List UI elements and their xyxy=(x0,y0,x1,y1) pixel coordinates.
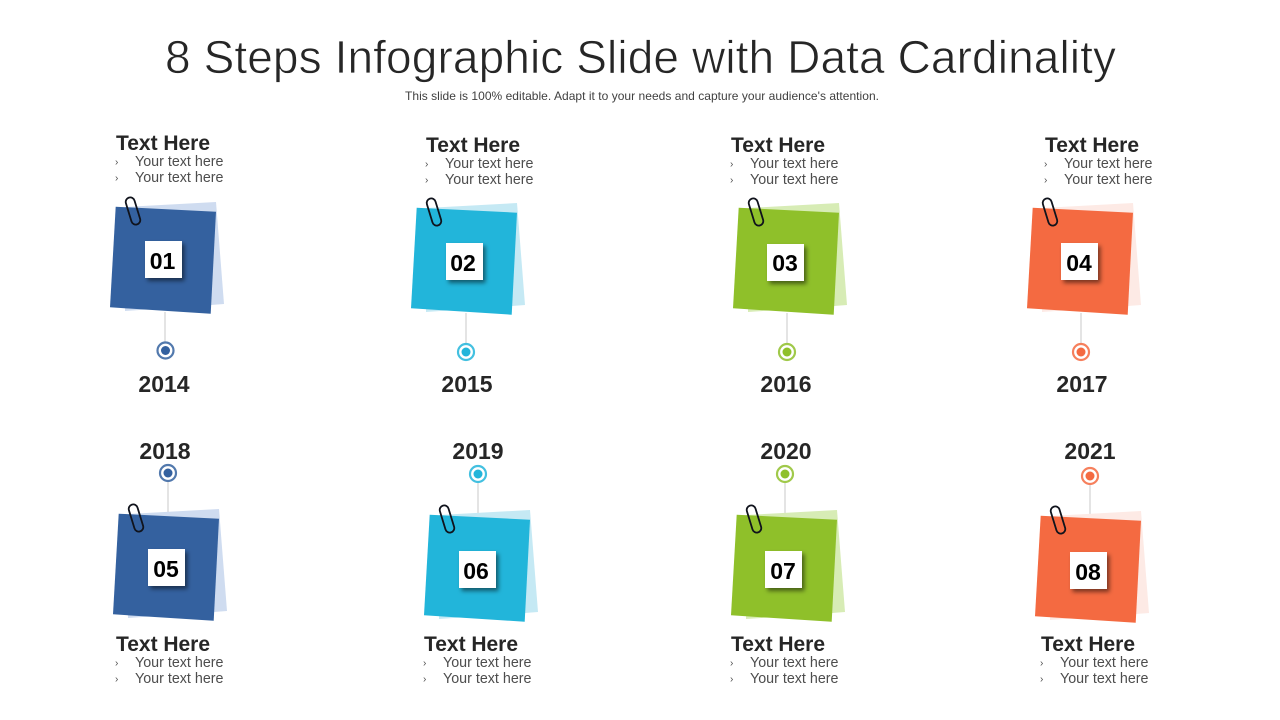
number 01 xyxy=(145,241,182,278)
step 07 xyxy=(730,438,845,687)
text block 07 xyxy=(730,633,839,687)
connector 06 xyxy=(477,483,479,517)
text block 01: › xyxy=(115,173,118,184)
text block 04: Your text here xyxy=(1064,172,1153,188)
text block 02: Your text here xyxy=(445,156,534,172)
number 02: 02 xyxy=(450,250,476,276)
text block 03: › xyxy=(730,159,733,170)
step 03 xyxy=(730,134,847,397)
text block 08: › xyxy=(1040,674,1043,685)
marker 02 xyxy=(458,344,474,360)
text block 08: Text Here xyxy=(1041,633,1135,656)
title: 8 Steps Infographic Slide with Data Cardinality xyxy=(165,31,1116,83)
text block 07: Your text here xyxy=(750,671,839,687)
text block 08 xyxy=(1040,633,1149,687)
connector 08 xyxy=(1089,485,1091,518)
paperclip 04 xyxy=(1042,197,1058,227)
text block 03: Text Here xyxy=(731,134,825,157)
paperclip 07 xyxy=(746,504,762,534)
text block 08: › xyxy=(1040,658,1043,669)
text block 07: › xyxy=(730,658,733,669)
year 2018: 2018 xyxy=(139,438,191,464)
year 2021: 2021 xyxy=(1064,438,1116,464)
text block 08: Your text here xyxy=(1060,671,1149,687)
step 01 xyxy=(110,132,224,397)
number 07 xyxy=(765,551,802,588)
marker 03 xyxy=(779,344,795,360)
text block 07: Your text here xyxy=(750,655,839,671)
step 06 xyxy=(423,438,538,687)
text block 05: Text Here xyxy=(116,633,210,656)
marker 07 xyxy=(777,466,793,482)
text block 05 xyxy=(115,633,224,687)
sticky note 06 xyxy=(424,510,538,622)
text block 06 xyxy=(423,633,532,687)
number 06 xyxy=(459,551,496,588)
text block 02: Your text here xyxy=(445,172,534,188)
step 04 xyxy=(1027,134,1153,397)
text block 05: › xyxy=(115,658,118,669)
year 2014: 2014 xyxy=(138,371,190,397)
text block 03: Your text here xyxy=(750,156,839,172)
sticky note 08 xyxy=(1035,511,1149,623)
text block 02 xyxy=(425,134,534,188)
text block 04 xyxy=(1044,134,1153,188)
text block 04: › xyxy=(1044,159,1047,170)
text block 04: Your text here xyxy=(1064,156,1153,172)
text block 03: Your text here xyxy=(750,172,839,188)
paperclip 02 xyxy=(426,197,442,227)
text block 07: › xyxy=(730,674,733,685)
sticky note 03 xyxy=(733,203,847,315)
text block 06: › xyxy=(423,658,426,669)
text block 03: › xyxy=(730,175,733,186)
number 01: 01 xyxy=(150,248,175,274)
number 03 xyxy=(767,244,804,281)
text block 06: Your text here xyxy=(443,655,532,671)
marker 06 xyxy=(470,466,486,482)
connector 03 xyxy=(786,313,788,344)
subtitle: This slide is 100% editable. Adapt it to your needs and capture your audience's attention. xyxy=(405,89,879,103)
connector 07 xyxy=(784,483,786,517)
text block 04: › xyxy=(1044,175,1047,186)
connector 04 xyxy=(1080,313,1082,344)
number 02 xyxy=(446,243,483,280)
step 02 xyxy=(411,134,534,397)
paperclip 03 xyxy=(748,197,764,227)
year 2020: 2020 xyxy=(760,438,812,464)
text block 07: Text Here xyxy=(731,633,825,656)
text block 05: Your text here xyxy=(135,655,224,671)
number 08 xyxy=(1070,552,1107,589)
year 2019: 2019 xyxy=(452,438,504,464)
marker 01 xyxy=(158,342,174,358)
text block 08: Your text here xyxy=(1060,655,1149,671)
paperclip 05 xyxy=(128,503,144,533)
text block 01: › xyxy=(115,157,118,168)
marker 08 xyxy=(1082,468,1098,484)
paperclip 06 xyxy=(439,504,455,534)
number 07: 07 xyxy=(770,558,796,584)
step 05 xyxy=(113,438,227,687)
number 04: 04 xyxy=(1066,250,1092,276)
marker 04 xyxy=(1073,344,1089,360)
number 08: 08 xyxy=(1075,559,1101,585)
text block 02: › xyxy=(425,159,428,170)
text block 06: › xyxy=(423,674,426,685)
year 2016: 2016 xyxy=(760,371,812,397)
text block 01 xyxy=(115,132,224,186)
connector 05 xyxy=(167,482,169,516)
step 08 xyxy=(1035,438,1149,687)
sticky note 02 xyxy=(411,203,525,315)
number 05 xyxy=(148,549,185,586)
text block 05: › xyxy=(115,674,118,685)
connector 02 xyxy=(465,313,467,344)
paperclip 08 xyxy=(1050,505,1066,535)
sticky note 04 xyxy=(1027,203,1141,315)
sticky note 07 xyxy=(731,510,845,622)
year 2015: 2015 xyxy=(441,371,493,397)
text block 04: Text Here xyxy=(1045,134,1139,157)
text block 02: Text Here xyxy=(426,134,520,157)
connector 01 xyxy=(164,312,166,342)
text block 06: Text Here xyxy=(424,633,518,656)
text block 02: › xyxy=(425,175,428,186)
text block 01: Your text here xyxy=(135,170,224,186)
number 06: 06 xyxy=(463,558,489,584)
text block 01: Text Here xyxy=(116,132,210,155)
text block 05: Your text here xyxy=(135,671,224,687)
text block 06: Your text here xyxy=(443,671,532,687)
paperclip 01 xyxy=(125,196,141,226)
text block 03 xyxy=(730,134,839,188)
number 05: 05 xyxy=(153,556,179,582)
text block 01: Your text here xyxy=(135,154,224,170)
marker 05 xyxy=(160,465,176,481)
sticky note 05 xyxy=(113,509,227,621)
number 03: 03 xyxy=(772,250,798,276)
number 04 xyxy=(1061,243,1098,280)
sticky note 01 xyxy=(110,202,224,314)
year 2017: 2017 xyxy=(1056,371,1108,397)
